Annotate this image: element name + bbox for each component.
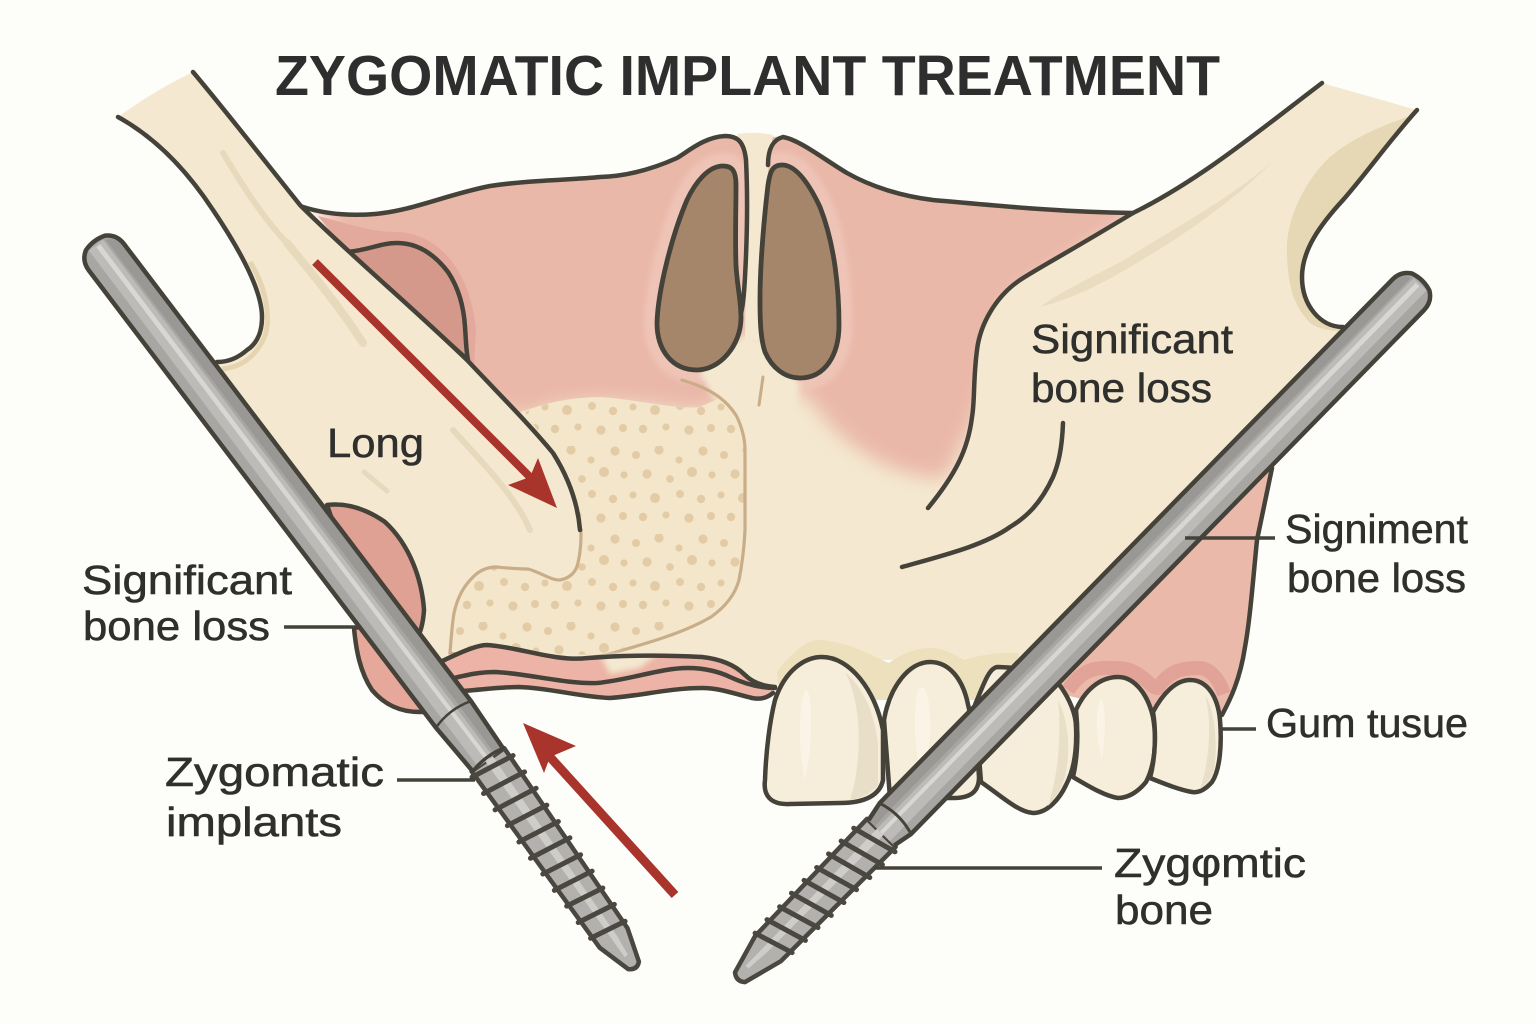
central maxilla bone	[440, 280, 1300, 700]
tooth 4	[1073, 677, 1155, 798]
collar end	[471, 746, 503, 771]
label: Signiment bone loss with leader	[1185, 506, 1469, 601]
label: Significant bone loss (left) with leader	[82, 557, 356, 649]
label: Zygomtic bone with leader: Zygφmtic	[1114, 840, 1306, 886]
right arm ridge	[1040, 162, 1272, 307]
label: Zygomtic bone with leader	[874, 840, 1306, 933]
maxilla anatomy illustration	[118, 72, 1417, 813]
left zygomatic implant	[69, 227, 661, 983]
collar ring	[434, 698, 471, 728]
soft cream nasal floor	[700, 335, 800, 425]
shaft	[866, 265, 1438, 848]
right arm upper outline	[928, 83, 1322, 508]
left nostril	[657, 166, 741, 370]
top contour right of septum	[768, 137, 1133, 213]
tooth 3 (behind implant)	[975, 667, 1076, 813]
top contour left of septum	[303, 136, 747, 317]
label: Zygomatic implants with leader: implants	[166, 799, 342, 845]
septum	[737, 133, 773, 340]
right gum outline	[1222, 468, 1272, 715]
left arm outer outline	[118, 117, 262, 362]
label: Signiment bone loss with leader: bone loss	[1287, 555, 1466, 601]
shaft	[77, 228, 505, 773]
label: Significant bone loss (left) with leader: bone loss	[83, 603, 270, 649]
right gum tissue	[1055, 468, 1272, 715]
right arm shadow	[1287, 116, 1412, 331]
collar ring	[880, 801, 914, 834]
lower left sinus blob	[327, 505, 424, 640]
right arm outer outline	[1302, 110, 1417, 327]
tan gum line above teeth	[777, 640, 1030, 700]
tooth 2	[884, 662, 979, 798]
label: Significant bone loss (left) with leader: Significant	[82, 557, 293, 603]
gum tissue: sinus and nasal soft tissue	[310, 136, 1126, 486]
tooth 1	[765, 657, 883, 804]
cancellous bone dotted region	[450, 380, 745, 659]
arrow: upward insertion direction	[523, 723, 675, 895]
label: Gum tusue with leader: Gum tusue	[1266, 700, 1468, 746]
label: Significant bone loss (upper right): Significant	[1031, 316, 1234, 362]
title: ZYGOMATIC IMPLANT TREATMENT	[275, 44, 1220, 108]
right nostril	[760, 165, 839, 378]
bone outlines	[118, 72, 1417, 567]
alveolar gum bands	[436, 645, 775, 699]
label: Signiment bone loss with leader: Signiment	[1285, 506, 1469, 552]
gum margin shading	[1068, 668, 1224, 694]
darker halo around sinus	[318, 216, 476, 365]
label: Significant bone loss (upper right)	[1031, 316, 1234, 411]
tan edge on left hook	[222, 262, 267, 369]
label: Significant bone loss (upper right): bone loss	[1031, 365, 1212, 411]
tooth 5	[1150, 680, 1221, 792]
label: Zygomatic implants with leader: Zygomatic	[165, 749, 384, 795]
threaded section	[469, 747, 654, 981]
lighter halo around nostrils	[657, 165, 839, 378]
left arm inner outline	[193, 72, 580, 530]
arrow: long path down the zygomatic buttress	[315, 262, 557, 508]
bone ridge highlights left	[223, 153, 530, 530]
label: Zygomatic implants with leader	[165, 749, 475, 845]
teeth	[765, 657, 1221, 813]
right zygomatic implant	[721, 264, 1439, 995]
tick at nasal spine	[759, 377, 763, 405]
label: Zygomtic bone with leader: bone	[1115, 887, 1213, 933]
threaded section	[721, 817, 898, 995]
lower left gum tissue	[354, 620, 445, 712]
right zygomatic arm of bone	[900, 83, 1417, 640]
label: Long: Long	[327, 420, 424, 466]
curved pointer line	[902, 423, 1063, 567]
left zygomatic arm of bone	[118, 72, 580, 665]
maxillary sinus left	[347, 243, 468, 360]
